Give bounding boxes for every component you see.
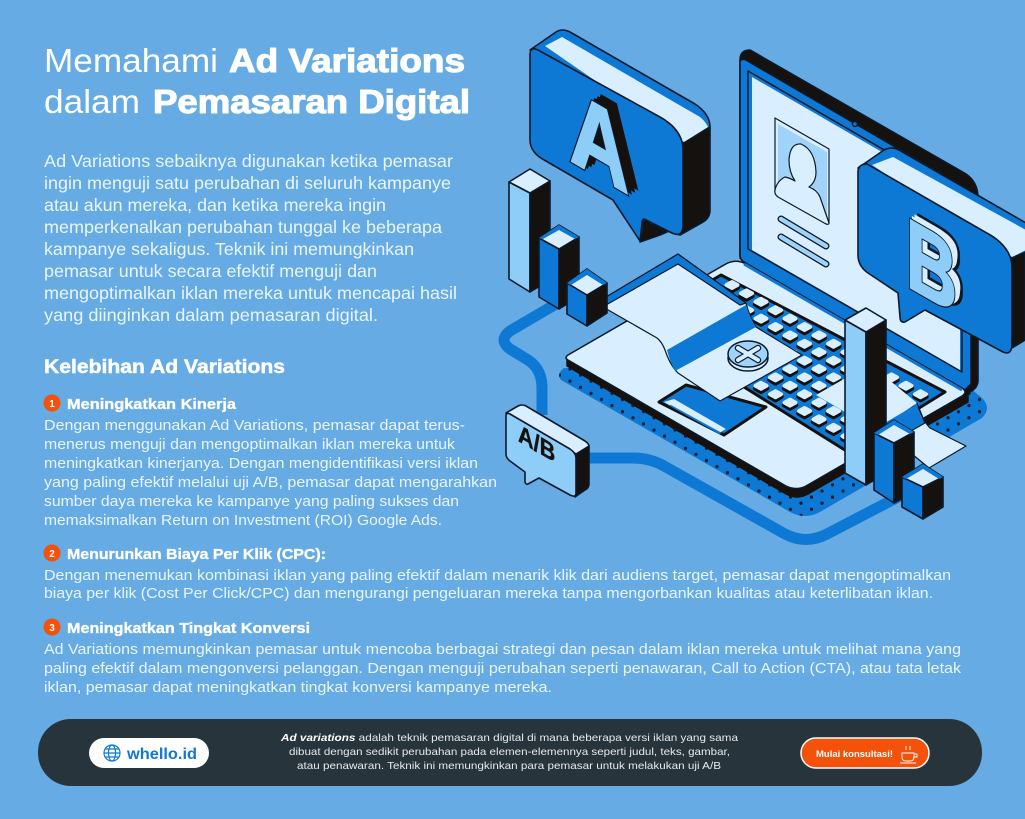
item 2: biaya per klik (Cost Per Click/CPC) dan mengurangi pengeluaran mereka tanpa mengorbankan kualitas atau keterlibatan iklan. [44,585,933,602]
item 3: iklan, pemasar dapat meningkatkan tingkat konversi kampanye mereka. [44,679,552,696]
letter A: A [570,67,629,216]
paper fold on keyboard, right side [816,364,966,468]
item 3 [44,618,962,696]
speech bubble A/B [506,405,589,497]
item 1: Meningkatkan Kinerja [67,396,237,413]
bar chart: right [845,308,943,519]
letter A: A [573,65,632,214]
intro paragraph: pemasar untuk secara efektif menguji dan [44,261,377,281]
item 2 [44,544,951,602]
CTA button: Mulai konsultasi! [816,749,893,760]
connector lines [504,304,900,540]
title: Memahami [44,42,218,79]
keyboard [640,275,945,452]
letter B: B [906,197,957,336]
footer definition text: atau penawaran. Teknik ini memungkinkan para pemasar untuk melakukan uji A/B [297,760,721,772]
logo [89,738,209,768]
intro paragraph: mengoptimalkan iklan mereka untuk mencapai hasil [44,283,457,303]
speech bubble B [858,148,1025,353]
letter B: B [914,195,965,335]
title [44,42,470,120]
item 1: meningkatkan kinerjanya. Dengan mengidentifikasi versi iklan [44,455,478,472]
item 2: Dengan menemukan kombinasi iklan yang paling efektif dalam menarik klik dari audiens target, pemasar dapat mengoptimalkan [44,567,951,584]
title: Ad Variations [229,42,465,79]
title: dalam [44,83,140,120]
item 2: Menurunkan Biaya Per Klik (CPC): [67,546,326,563]
intro paragraph: kampanye sekaligus. Teknik ini memungkinkan [44,239,414,259]
letter A: A [576,64,635,213]
letter B: B [906,197,957,336]
letter A: A [579,62,638,211]
item 1: Dengan menggunakan Ad Variations, pemasar dapat terus- [44,417,465,434]
item 1: 1 [49,399,55,410]
letter A: A [570,67,629,216]
laptop base [566,261,968,497]
icon: globe [104,745,120,761]
intro paragraph: Ad Variations sebaiknya digunakan ketika pemasar [44,151,453,171]
heading: Kelebihan: Kelebihan Ad Variations [44,357,285,378]
footer definition text: dibuat dengan sedikit perubahan pada elemen-elemennya seperti judul, teks, gambar, [289,746,730,758]
logo: whello.id [126,746,197,763]
letter B: B [909,195,959,334]
CTA button [801,738,929,768]
title: Pemasaran Digital [153,83,470,120]
dotted shadow [559,368,987,516]
speech bubble A [530,30,710,242]
item 3: 3 [49,623,55,634]
item 1: yang paling efektif melalui uji A/B, pemasar dapat mengarahkan [44,474,497,491]
item 1: sumber daya mereka ke kampanye yang paling sukses dan [44,493,459,510]
item 1: menerus menguji dan mengoptimalkan iklan mereka untuk [44,436,456,453]
intro paragraph: memperkenalkan perubahan tunggal ke beberapa [44,217,442,237]
footer definition text [280,732,738,772]
profile card [775,118,829,264]
letter B: B [911,193,962,333]
speech bubble A/B: A/B [518,419,555,469]
item 3: Meningkatkan Tingkat Konversi [67,620,310,637]
item 1: memaksimalkan Return on Investment (ROI) Google Ads. [44,512,442,529]
item 3: paling efektif dalam mengonversi pelanggan. Dengan menguji perubahan seperti penawaran, Call to Action (CTA), atau tata letak [44,660,962,677]
icon: close coin [728,341,768,371]
illustration: laptop A/B test [504,30,1025,540]
item 1 [44,394,497,529]
item 3: Ad Variations memungkinkan pemasar untuk mencoba berbagai strategi dan pesan dalam iklan mereka untuk melihat mana yang [44,641,961,658]
letter B: B [914,192,965,331]
bar chart: left [509,169,607,326]
icon: cup [900,746,917,763]
footer definition text: Ad variations adalah teknik pemasaran digital di mana beberapa versi iklan yang sama [280,732,738,744]
touchpad [659,385,766,435]
intro paragraph: ingin menguji satu perubahan di seluruh kampanye [44,173,451,193]
intro paragraph: yang diinginkan dalam pemasaran digital. [44,305,378,325]
laptop lid [740,50,978,392]
footer bar [38,719,982,786]
item 2: 2 [49,549,55,560]
intro paragraph: atau akun mereka, dan ketika mereka ingin [44,195,386,215]
intro paragraph [44,151,457,325]
ad paper with blue band [596,254,802,401]
